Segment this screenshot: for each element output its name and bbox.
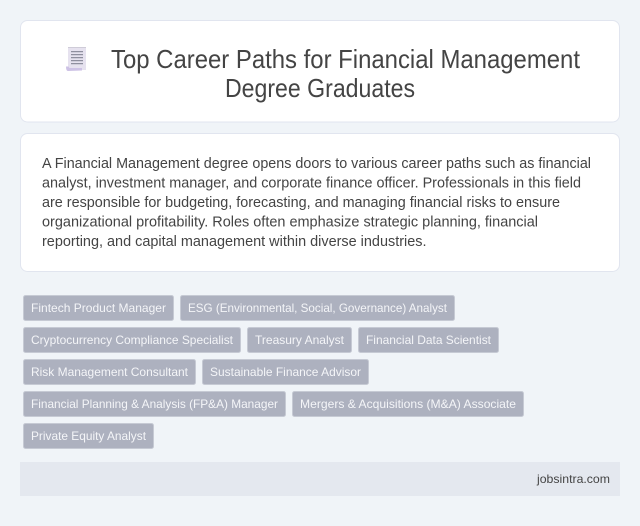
tag: ESG Analyst: ESG (Environmental, Social, Governance) Analyst: [188, 301, 448, 315]
panel: header: [20, 20, 620, 122]
tag: Fintech Product Manager: [24, 296, 174, 320]
footer: [20, 462, 620, 496]
tag: FP&A Manager: Financial Planning & Analysis (FP&A) Manager: [31, 397, 278, 411]
title: Top Career Paths for Financial Management: [111, 46, 580, 74]
panel: description: A Financial Management degree opens doors to various career paths such as financial: [42, 156, 591, 172]
tag: Cryptocurrency Compliance Specialist: Cryptocurrency Compliance Specialist: [31, 333, 234, 347]
tag: Sustainable Finance Advisor: Sustainable Finance Advisor: [210, 365, 361, 379]
tag: Financial Data Scientist: Financial Data Scientist: [366, 333, 492, 347]
panel: description: analyst, investment manager, and corporate finance officer. Professionals in this field: [42, 176, 581, 192]
tag: Cryptocurrency Compliance Specialist: [24, 328, 240, 352]
tag: Private Equity Analyst: [24, 424, 154, 448]
tag list: [24, 296, 524, 448]
panel: description: [20, 134, 620, 272]
tag: FP&A Manager: [24, 392, 286, 416]
tag: Treasury Analyst: [248, 328, 352, 352]
tag: Risk Management Consultant: Risk Management Consultant: [31, 365, 189, 379]
tag: M&A Associate: [292, 392, 524, 416]
tag: M&A Associate: Mergers & Acquisitions (M&A) Associate: [300, 397, 516, 411]
panel: description: organizational profitability. Roles often emphasize strategic planning, financial: [42, 214, 538, 230]
title: Degree Graduates: [225, 75, 415, 103]
icon: document receipt: [66, 47, 86, 71]
tag: Fintech Product Manager: Fintech Product Manager: [31, 301, 166, 315]
tag: Financial Data Scientist: [358, 328, 498, 352]
tag: Sustainable Finance Advisor: [202, 360, 368, 384]
tag: Risk Management Consultant: [24, 360, 196, 384]
tag: Private Equity Analyst: Private Equity Analyst: [31, 429, 147, 443]
footer: jobsintra.com: [536, 472, 610, 486]
panel: description: reporting, and capital management within diverse industries.: [42, 234, 426, 250]
tag: Treasury Analyst: Treasury Analyst: [255, 333, 345, 347]
panel: description: are responsible for budgeting, forecasting, and managing financial risks to ensure: [42, 195, 560, 211]
tag: ESG Analyst: [180, 296, 454, 320]
title: [111, 46, 580, 103]
